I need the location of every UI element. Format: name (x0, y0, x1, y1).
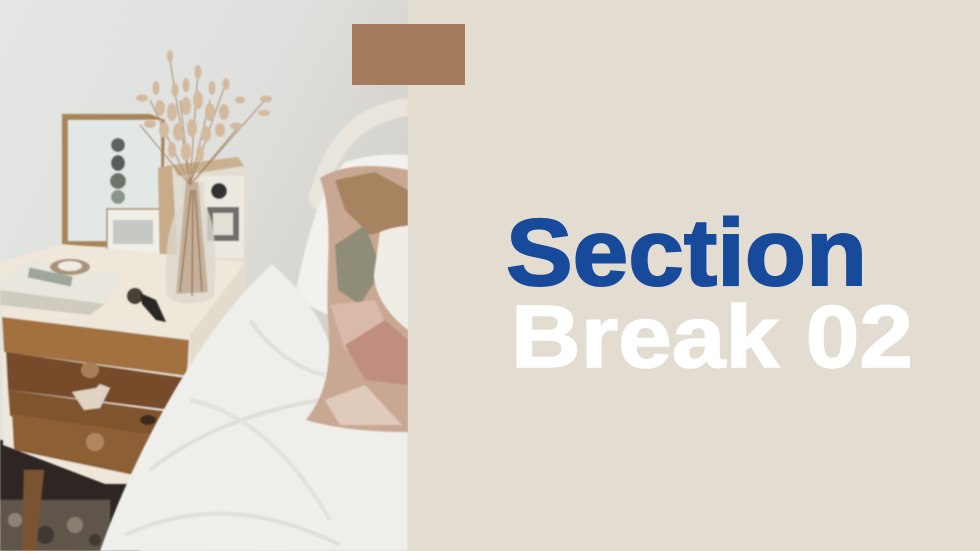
accent rectangle (352, 24, 465, 85)
panel: beige background (408, 0, 980, 551)
bed headboard (308, 98, 408, 218)
white pillow (294, 155, 408, 330)
nightstand (0, 244, 246, 484)
heading: Break 02: Break 02 (511, 287, 913, 386)
heading: Section: Section (506, 200, 867, 306)
items on nightstand (0, 259, 166, 322)
photo: bedside table and bed (0, 0, 408, 551)
glass vase (166, 182, 215, 303)
floor and rug (0, 440, 140, 551)
patterned cushion (306, 166, 408, 432)
duvet (100, 264, 408, 551)
books (158, 157, 252, 266)
dried flowers (136, 50, 272, 185)
picture frame (62, 114, 165, 259)
